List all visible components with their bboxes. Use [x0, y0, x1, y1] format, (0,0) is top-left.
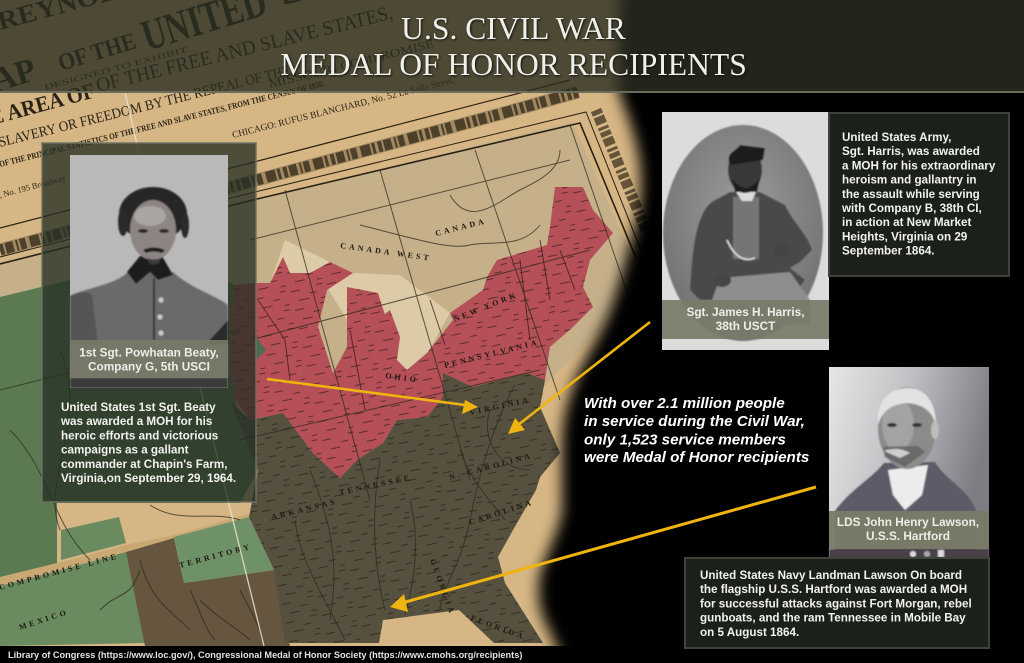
map: printed title lines: DESIGNED TO EXHIBIT: [43, 45, 189, 92]
arrow: Lawson to Mobile Bay: [390, 487, 816, 612]
map: place names: CANADA: [434, 216, 488, 238]
caption: [829, 511, 989, 549]
map: printed title lines: OF THE PRINCIPAL STATISTICS OF THE FREE AND SLAVE STATES, FROM THE CENSUS OF 1850.: [0, 78, 326, 169]
caption: LDS John Henry Lawson,: [837, 515, 979, 529]
text: Beaty citation: heroic efforts and victorious: [61, 429, 218, 442]
map: small green patch by Iowa: [256, 337, 266, 360]
text: Beaty citation: campaigns as a gallant: [61, 444, 189, 457]
header band: MEDAL OF HONOR RECIPIENTS: [280, 47, 747, 82]
panel: James H. Harris: [662, 112, 1009, 350]
caption: [662, 300, 829, 339]
map: printed title lines: CHICAGO: RUFUS BLANCHARD, No. 52 La Salle Street.: [231, 76, 456, 141]
text: Beaty citation: commander at Chapin's Farm,: [61, 458, 227, 471]
map: Canada and northern lands: [0, 122, 634, 420]
map: place names: TERRITORY: [178, 542, 253, 570]
black vignette covering right of the map: [538, 0, 1024, 663]
text panel: Harris citation: the assault while serving: [842, 188, 980, 201]
title: U.S. CIVIL WAR: [401, 11, 627, 46]
footer: sources: [0, 646, 1024, 663]
map: place names: COMPROMISE LINE: [0, 551, 120, 592]
text: Beaty citation: United States 1st Sgt. Beaty: [61, 401, 216, 414]
map: printed title lines: SLAVERY OR FREEDOM BY THE REPEAL OF THE: [0, 63, 292, 151]
callout: service statistic: in service during the Civil War,: [584, 413, 805, 430]
text panel: Harris citation: a MOH for his extraordinary: [842, 159, 996, 172]
photo: James Harris portrait: [662, 112, 829, 350]
map: free states in red: [230, 187, 613, 478]
map: ornamental border: [0, 80, 646, 264]
photo: John Lawson portrait: [829, 367, 989, 559]
caption: Sgt. James H. Harris,: [686, 305, 805, 319]
map: printed title lines: OF THE FREE AND SLAVE STATES,: [94, 2, 395, 97]
map background: [0, 0, 660, 646]
text panel: Harris citation: September 1864.: [842, 245, 935, 258]
caption: U.S.S. Hartford: [866, 529, 950, 543]
map: place names: CANADA WEST: [340, 241, 432, 263]
panel: Powhatan Beaty: [42, 143, 256, 502]
text panel: Harris citation: United States Army,: [842, 131, 951, 144]
map: tan compromise strip: [0, 500, 262, 586]
text: Beaty citation: was awarded a MOH for his: [60, 415, 212, 428]
map: Indian Territory: [174, 517, 274, 583]
map: place names: PENNSYLVANIA: [443, 338, 540, 370]
map: western green territories: [0, 280, 258, 577]
map: place names: N. CAROLINA: [448, 451, 534, 482]
text panel: Lawson citation: for successful attacks against Fort Morgan, rebel: [700, 597, 972, 610]
photo: Powhatan Beaty portrait: [70, 155, 228, 388]
map: place names: [0, 216, 540, 642]
map: place names: TENNESSEE: [339, 473, 413, 497]
caption: Company G, 5th USCI: [88, 360, 210, 374]
map: fold line: [125, 92, 264, 646]
map: printed title lines: [0, 0, 456, 200]
panel: John Henry Lawson: [685, 367, 989, 648]
text panel: Lawson citation: United States Navy Landman Lawson On board: [700, 569, 962, 582]
text panel: Harris citation: in action at New Market: [842, 216, 971, 229]
text panel: Harris citation: Sgt. Harris, was awarded: [842, 145, 980, 158]
map: place names: OHIO: [385, 371, 419, 385]
callout: service statistic: With over 2.1 million people: [584, 395, 785, 412]
arrow: Harris to Virginia: [508, 322, 650, 434]
text: Beaty citation: Virginia,on September 29, 1964.: [61, 472, 236, 485]
header band: [0, 0, 1024, 93]
text panel: Harris citation: [829, 113, 1009, 276]
footer: sources: Library of Congress (https://www.loc.gov/), Congressional Medal of Honor Society (https://www.cmohs.org/recipients): [8, 650, 522, 660]
arrow: Beaty to Virginia: [267, 379, 478, 414]
map: place names: FLORIDA: [469, 613, 527, 642]
text panel: Lawson citation: the flagship U.S.S. Hartford was awarded a MOH: [700, 583, 967, 596]
text panel: Lawson citation: on 5 August 1864.: [700, 626, 799, 639]
callout: service statistic: were Medal of Honor recipients: [584, 449, 809, 466]
caption: [70, 340, 228, 378]
map: slave states in dark: [230, 373, 560, 643]
map: New Mexico territory: [0, 517, 145, 646]
map: place names: CAROLINA: [468, 497, 535, 527]
caption: 38th USCT: [716, 319, 776, 333]
map: printed title lines: OF THE: [55, 28, 139, 77]
text panel: Harris citation: Heights, Virginia on 29: [842, 230, 968, 243]
map: graticule and rivers: [0, 125, 640, 640]
text panel: Harris citation: heroism and gallantry in: [842, 174, 977, 187]
map: place names: NEW YORK: [452, 290, 519, 324]
caption: 1st Sgt. Powhatan Beaty,: [79, 346, 219, 360]
text panel: Lawson citation: gunboats, and the ram Tennessee in Mobile Bay: [700, 612, 966, 625]
map: brown Texas interior: [126, 538, 290, 646]
callout: service statistic: only 1,523 service members: [584, 432, 786, 448]
map: printed title lines: MISSOURI COMPROMISE: [267, 36, 436, 91]
map: Great Lakes shoreline light areas: [270, 240, 450, 370]
map: place names: MEXICO: [18, 607, 70, 632]
text panel: Lawson citation: [685, 558, 989, 648]
map: place names: ARKANSAS: [270, 497, 338, 522]
map: place names: GEORGIA: [428, 558, 457, 617]
text panel: Harris citation: with Company B, 38th CI,: [841, 202, 982, 215]
map: place names: VIRGINIA: [469, 395, 532, 417]
